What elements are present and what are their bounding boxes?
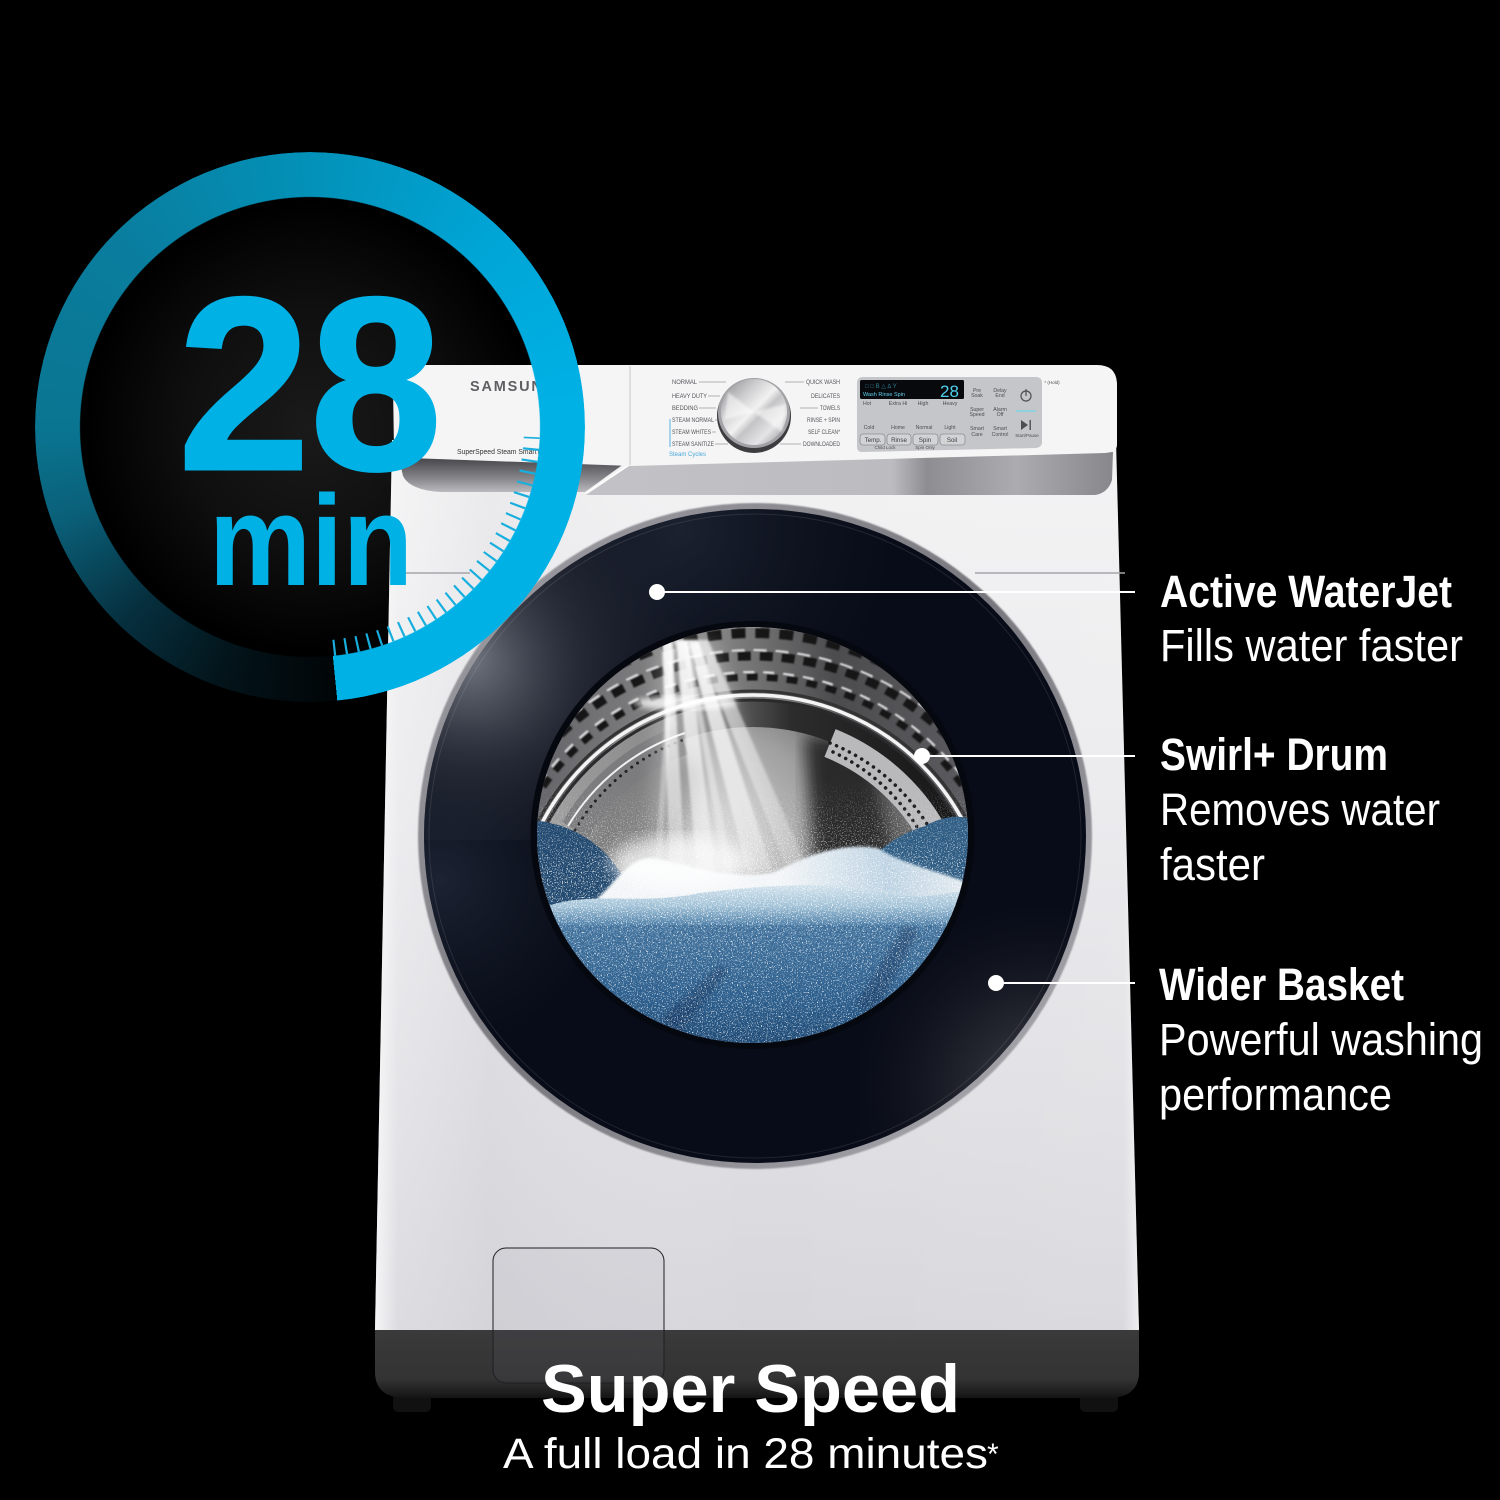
timer unit: min: [209, 469, 413, 613]
dial cycle labels: HEAVY DUTY: [672, 393, 708, 400]
dial cycle labels: DELICATES: [811, 393, 840, 400]
water jet beams: [654, 640, 804, 880]
control panel: [857, 377, 1060, 452]
control panel: Child Lock: [874, 445, 896, 450]
timer ring: [35, 152, 585, 702]
door dark ring: [424, 509, 1086, 1163]
bottom subtitle: A full load in 28 minutes: [503, 1430, 988, 1478]
washing machine: [375, 365, 1139, 1412]
control panel: Hot: [863, 401, 872, 407]
callout description: Fills water faster: [1160, 620, 1463, 671]
callout heading: Swirl+ Drum: [1160, 729, 1388, 780]
body edge shading: [375, 440, 1139, 1330]
panel buttons: [860, 434, 965, 445]
right blue mound: [880, 816, 968, 904]
control panel: Temp.: [865, 437, 882, 444]
control panel: Speed: [969, 412, 985, 418]
callout: swirl drum: [914, 729, 1440, 890]
submerged folds: [660, 925, 918, 1035]
control panel: End: [995, 393, 1005, 399]
control panel: Soil: [947, 437, 957, 444]
dial cycle labels: RINSE + SPIN: [807, 417, 840, 424]
control panel: Control: [992, 432, 1008, 438]
drum lifters: [568, 733, 939, 852]
dial: [717, 378, 791, 453]
dial cycle labels: TOWELS: [820, 405, 840, 412]
control panel: * (Hold): [1044, 380, 1060, 385]
machine feet: [393, 1394, 1118, 1412]
side seam: [389, 572, 1125, 574]
power icon: [1021, 389, 1031, 401]
dial cycle labels: BEDDING: [672, 405, 698, 412]
bubble speckles: [535, 770, 971, 1054]
callout description: faster: [1160, 839, 1265, 890]
digital display: [860, 380, 964, 401]
control recess: [399, 452, 1113, 495]
control panel: Start/Pause: [1015, 433, 1039, 438]
control panel: Alarm: [993, 407, 1007, 413]
bottom title: Super Speed: [541, 1351, 960, 1427]
machine body: [375, 440, 1139, 1330]
control panel: Off: [997, 412, 1004, 418]
callout heading: Wider Basket: [1159, 959, 1404, 1010]
control panel: Heavy: [943, 401, 958, 407]
control panel: Extra Hi: [889, 401, 907, 407]
callout description: performance: [1159, 1069, 1392, 1120]
control panel: Light: [944, 425, 956, 431]
control panel: Pre: [973, 388, 981, 394]
callout: wider basket: [988, 959, 1483, 1120]
water volume: [550, 885, 960, 1043]
dial cycle labels: [669, 379, 840, 458]
filter access panel: [493, 1248, 664, 1383]
control panel: Super: [970, 407, 984, 413]
background glow behind timer: [60, 177, 560, 677]
control panel: Soak: [971, 393, 983, 399]
control panel: Smart: [970, 426, 984, 432]
control panel: Home: [891, 425, 905, 431]
callout: active waterjet: [649, 566, 1463, 671]
digital display: 28: [940, 382, 959, 401]
door glass with drum and water: [537, 627, 968, 1043]
control panel: Care: [971, 432, 983, 438]
bottom subtitle: *: [987, 1438, 999, 1471]
control console: [393, 365, 1117, 466]
control panel: Smart: [993, 426, 1007, 432]
callout description: Removes water: [1160, 784, 1440, 835]
lower dark band: [375, 1330, 1139, 1398]
foam: [590, 847, 975, 925]
drum rim: [537, 690, 968, 904]
control panel: Rinse: [891, 437, 907, 444]
control panel: Cold: [864, 425, 874, 431]
left blue mound: [537, 820, 622, 930]
feature line: SuperSpeed Steam SmartThings: [457, 449, 557, 456]
dial cycle labels: NORMAL: [672, 379, 697, 386]
control panel: Delay: [993, 388, 1007, 394]
callout description: [1160, 784, 1440, 890]
dial cycle labels: STEAM NORMAL: [672, 417, 714, 424]
callout heading: Active WaterJet: [1160, 566, 1452, 617]
control panel: High: [918, 401, 928, 407]
dial cycle labels: DOWNLOADED: [803, 441, 840, 448]
timer number: 28: [178, 247, 442, 522]
control panel: Spin: [919, 437, 932, 444]
dial cycle labels: QUICK WASH: [806, 379, 840, 386]
control panel: Spin Only: [915, 445, 936, 450]
play pause icon: [1021, 420, 1031, 430]
dark water grain: [559, 925, 946, 1043]
dial cycle labels: SELF CLEAN*: [808, 429, 840, 436]
dial cycle labels: STEAM WHITES: [672, 429, 711, 436]
samsung wordmark: SAMSUNG: [470, 379, 555, 395]
digital display: □ □ B △ ∆ Y: [865, 383, 897, 390]
dial cycle labels: Steam Cycles: [669, 452, 706, 458]
drum interior: [564, 696, 912, 1043]
door rim: [418, 503, 1092, 1169]
perforated outer drum: [537, 627, 968, 828]
timer ticks: [333, 437, 532, 648]
control panel: Normal: [916, 425, 932, 431]
dial cycle labels: STEAM SANITIZE: [672, 441, 714, 448]
callout description: [1159, 1014, 1483, 1120]
digital display: Wash Rinse Spin: [863, 392, 905, 398]
